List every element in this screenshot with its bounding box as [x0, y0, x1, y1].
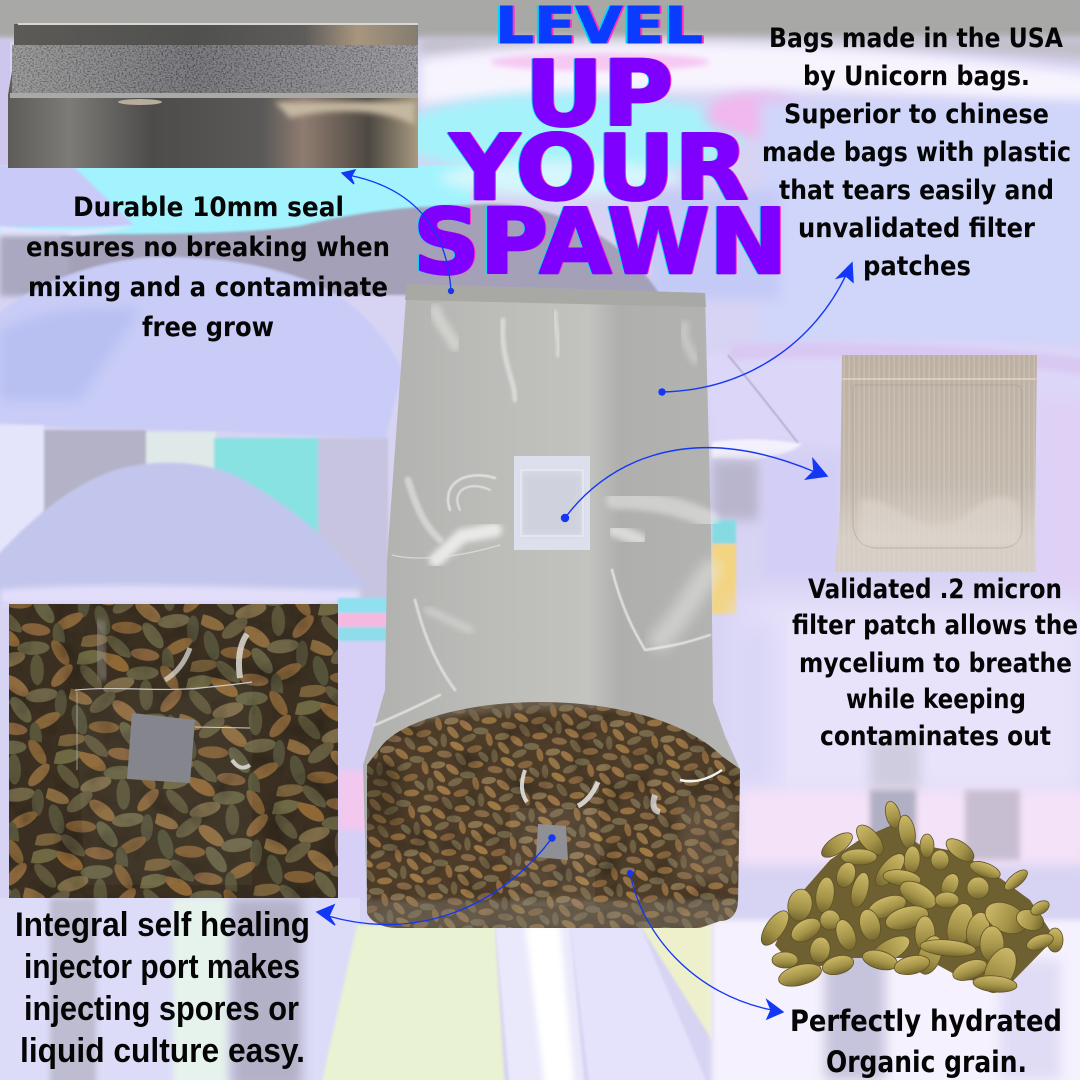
mushroom spawn bag — [363, 284, 740, 928]
text: made in the USA: unvalidated filter — [798, 213, 1036, 244]
bag filter patch — [514, 456, 590, 550]
bag wrinkles and highlights — [375, 310, 711, 725]
photo: filter patch — [835, 355, 1037, 572]
grey mound behind text and title — [60, 204, 660, 295]
arrow: bag body to USA text — [659, 263, 853, 395]
cyan sky behind title — [0, 165, 470, 235]
text: seal description: mixing and a contaminate — [28, 272, 388, 303]
text: organic grain description: Organic grain. — [826, 1045, 1027, 1079]
right lavender field — [760, 100, 1080, 345]
bottom field — [0, 898, 360, 1080]
title: LEVEL UP YOUR SPAWN — [412, 0, 788, 295]
title line: SPAWN: SPAWN — [413, 190, 787, 295]
title line: SPAWN: SPAWN — [414, 190, 788, 295]
text: injector port description: liquid culture easy. — [20, 1032, 305, 1070]
second left cap — [0, 463, 368, 604]
arrow: grain in bag to grain pile — [628, 870, 783, 1019]
main left cap — [0, 257, 402, 440]
text: seal description — [26, 192, 390, 343]
text: made in the USA — [762, 23, 1071, 282]
photo: 10mm seal close-up — [8, 23, 418, 168]
arrow: patch on bag to filter patch photo — [562, 448, 827, 522]
text: filter patch description: contaminates out — [820, 721, 1051, 752]
photo: injector port close-up on grain — [9, 604, 338, 898]
title line: SPAWN: SPAWN — [412, 190, 786, 295]
arrow: injector port to close-up — [317, 835, 555, 925]
top grey band — [0, 0, 1080, 38]
text: made in the USA: patches — [863, 251, 971, 282]
photo: hydrated grain pile — [756, 800, 1063, 998]
text: made in the USA: by Unicorn bags. — [803, 61, 1030, 92]
title line: UP: UP — [524, 42, 672, 147]
text: seal description: free grow — [142, 312, 274, 343]
text: injector port description: injecting spores or — [24, 990, 299, 1028]
grain inside bag — [360, 695, 745, 930]
text: made in the USA: Superior to chinese — [784, 99, 1049, 130]
arrow: seal to photo — [342, 170, 454, 294]
small top-left cap — [0, 165, 134, 228]
text: seal description: Durable 10mm seal — [73, 192, 344, 223]
title line: YOUR: YOUR — [450, 116, 749, 221]
text: filter patch description — [792, 574, 1078, 752]
stems under left cap — [0, 425, 388, 608]
right bottom pink and stems — [738, 790, 1080, 865]
text: filter patch description: while keeping — [846, 684, 1026, 715]
bag top seal — [405, 284, 706, 307]
title line: UP: UP — [526, 42, 674, 147]
title line: UP: UP — [525, 42, 673, 147]
text: injector port description — [15, 906, 310, 1070]
text: organic grain description — [790, 1004, 1062, 1079]
injector patch highlights on bag — [510, 770, 722, 906]
title line: YOUR: YOUR — [449, 116, 748, 221]
right cap and stems — [700, 341, 1080, 459]
text: seal description: ensures no breaking when — [26, 232, 390, 263]
injector port on bag — [536, 824, 568, 860]
text: injector port description: injector port makes — [24, 948, 300, 986]
title line: YOUR: YOUR — [448, 116, 747, 221]
text: injector port description: Integral self healing — [15, 906, 310, 944]
